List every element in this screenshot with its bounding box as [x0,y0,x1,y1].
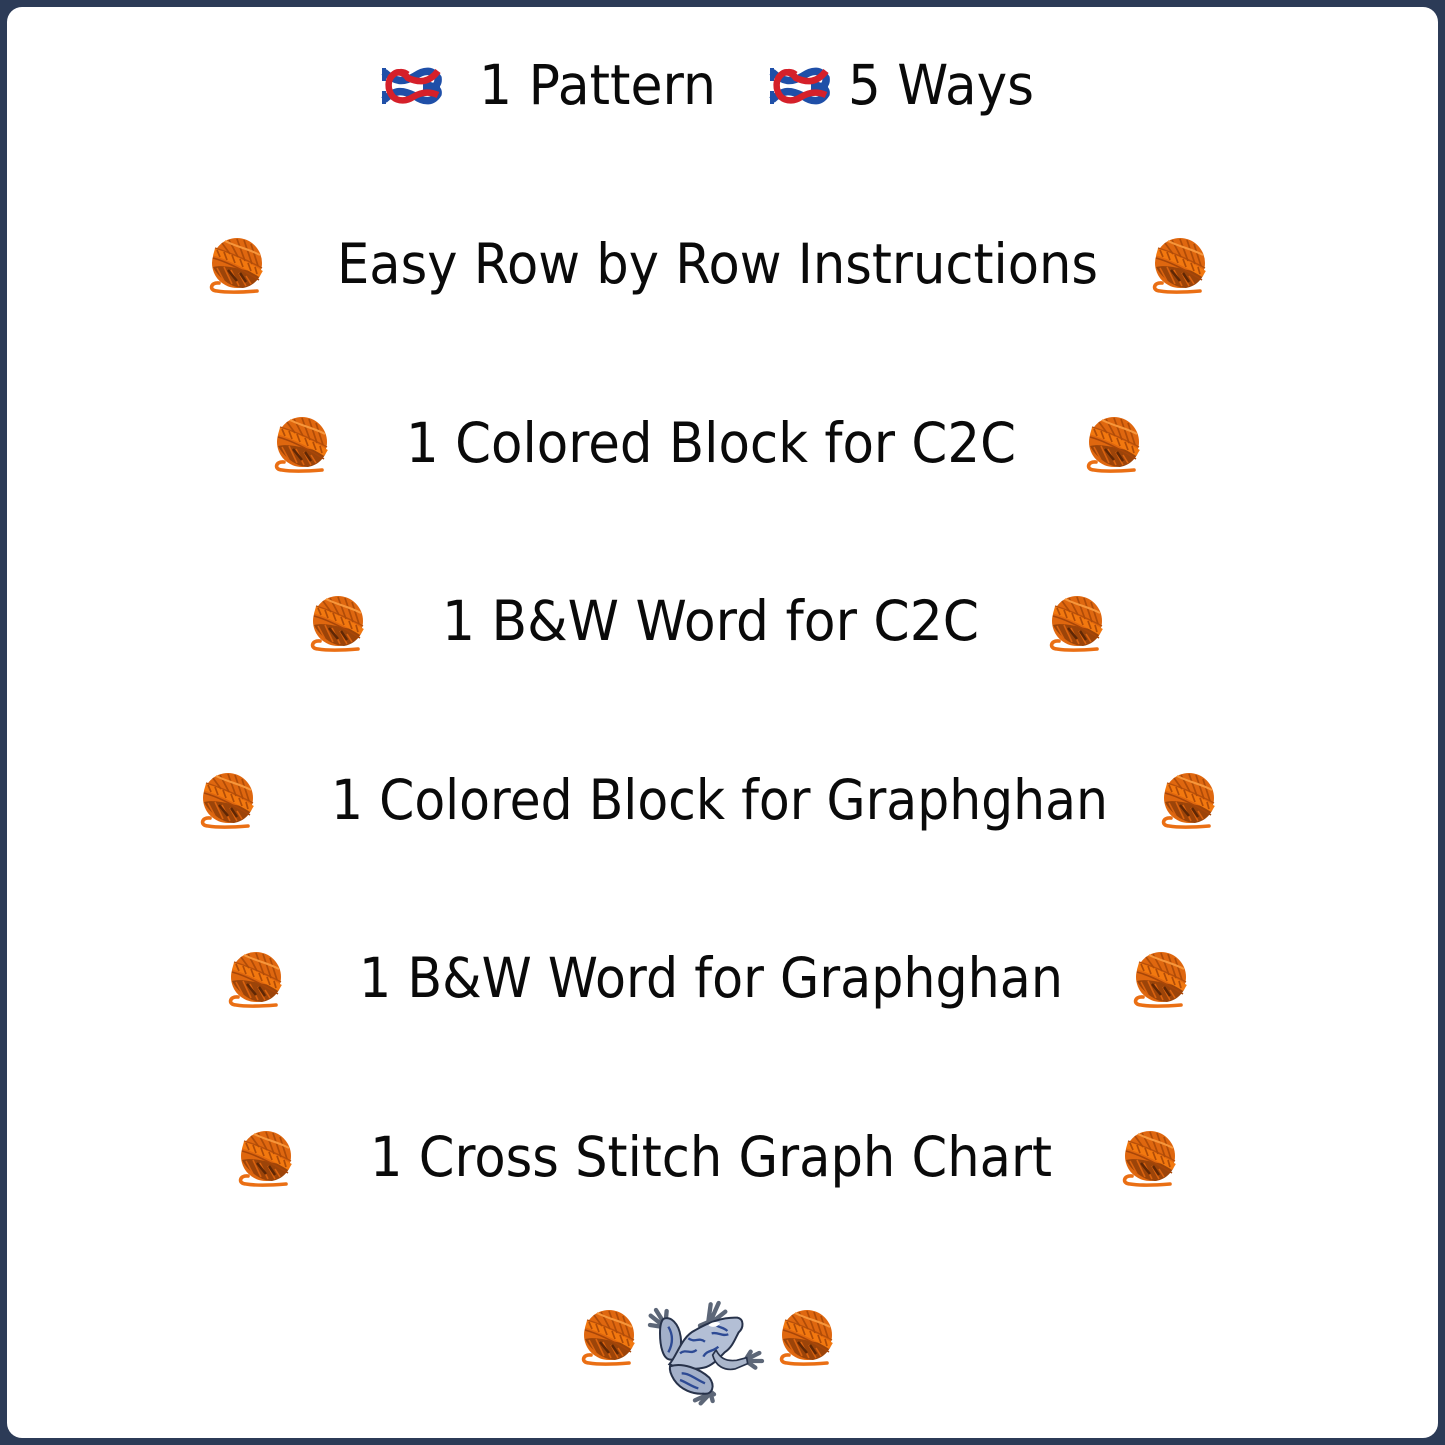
row: 1 Cross Stitch Graph Chart [241,1125,1175,1189]
title text: 5 Ways: 5 Ways [848,53,1034,117]
title text: 1 Pattern: 1 Pattern [479,53,716,117]
text: cross stitch chart: 1 Cross Stitch Graph Chart [370,1125,1052,1189]
icon: yarn ball right [1164,773,1214,827]
text: colored block graphghan: 1 Colored Block for Graphghan [331,768,1108,832]
icon: yarn ball right [1089,417,1139,471]
icon: yarn ball left [241,1131,291,1185]
icon: frog [650,1303,762,1403]
icon: yarn ball left [277,417,327,471]
icon: yarn ball right [1052,596,1102,650]
row: 1 Colored Block for C2C [277,411,1139,475]
row: 1 B&W Word for Graphghan [231,946,1186,1010]
icon: yarn ball left [231,952,281,1006]
icon: yarn ball left [212,238,262,292]
text: B&W word graphghan: 1 B&W Word for Graphghan [359,946,1063,1010]
icon: yarn ball left [313,596,363,650]
row: 1 Colored Block for Graphghan [203,768,1214,832]
icon: yarn ball left [584,1310,634,1364]
text: easy instructions: Easy Row by Row Instructions [337,232,1098,296]
text: B&W word C2C: 1 B&W Word for C2C [442,589,979,653]
title row: 1 Pattern 5 Ways [384,53,1034,117]
icon: knot right [772,68,826,104]
icon: knot left [384,68,438,104]
text: colored block C2C: 1 Colored Block for C2C [406,411,1016,475]
icon: yarn ball right [1125,1131,1175,1185]
icon: yarn ball left [203,773,253,827]
footer icons: yarn balls and frog [584,1303,832,1403]
row: Easy Row by Row Instructions [212,232,1205,296]
row: 1 B&W Word for C2C [313,589,1102,653]
icon: yarn ball right [1155,238,1205,292]
icon: yarn ball right [782,1310,832,1364]
icon: yarn ball right [1136,952,1186,1006]
